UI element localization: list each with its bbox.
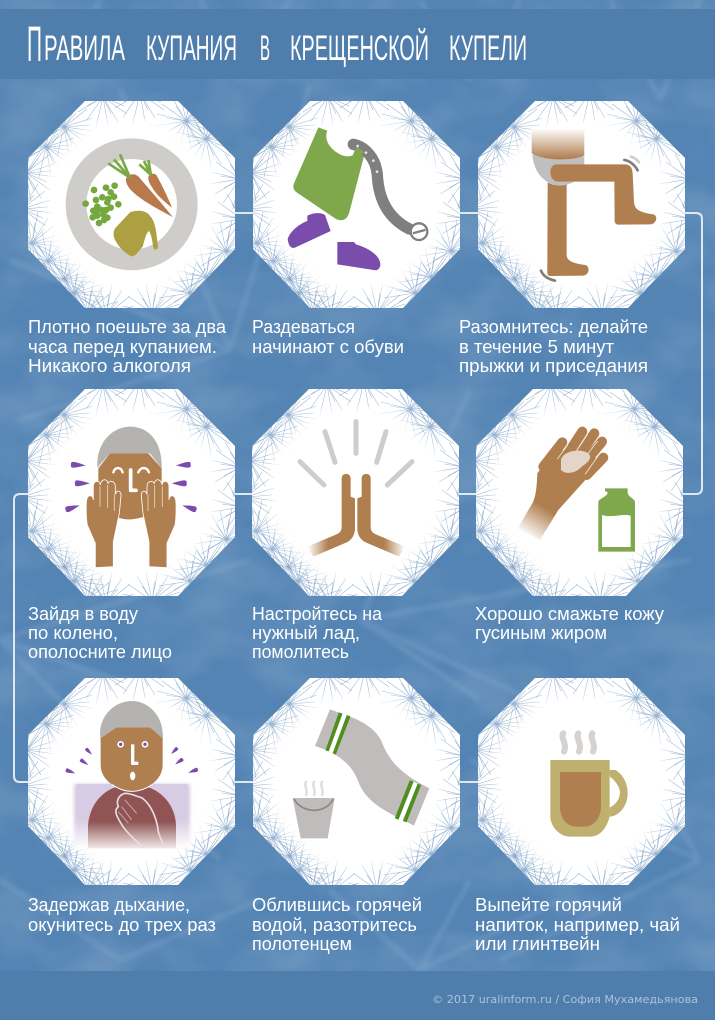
panel: eat before bathing	[0, 62, 272, 376]
caption: Облившись горячей	[252, 895, 422, 915]
icon: clothes	[288, 127, 427, 270]
caption	[475, 895, 680, 954]
caption: Зайдя в воду	[28, 604, 138, 624]
caption: в течение 5 минут	[459, 337, 614, 357]
panel: douse and towel	[216, 639, 497, 954]
title: КУПАНИЯ	[146, 29, 237, 68]
icon: mug	[550, 733, 628, 837]
header band	[0, 9, 715, 79]
caption: Никакого алкоголя	[28, 356, 191, 376]
caption: полотенцем	[252, 934, 352, 954]
panel: rinse face	[0, 350, 272, 662]
caption: Раздеваться	[252, 317, 355, 337]
panel: hot drink	[441, 639, 715, 954]
icon: plate with food	[76, 149, 187, 260]
caption	[475, 604, 664, 643]
title: КУПЕЛИ	[449, 29, 527, 68]
caption: прыжки и приседания	[459, 356, 648, 376]
caption: или глинтвейн	[475, 934, 600, 954]
title: РАВИЛА	[44, 29, 125, 68]
caption	[252, 895, 422, 954]
caption	[459, 317, 648, 376]
icon: legs	[532, 128, 656, 281]
caption	[252, 604, 383, 662]
copyright: © 2017 uralinform.ru / София Мухамедьянова	[432, 993, 698, 1006]
caption: Настройтесь на	[252, 604, 383, 624]
title: В	[260, 29, 270, 68]
caption	[28, 604, 172, 662]
caption: часа перед купанием.	[28, 337, 217, 357]
caption: напиток, например, чай	[475, 915, 680, 935]
caption	[252, 317, 404, 357]
title: КРЕЩЕНСКОЙ	[290, 28, 429, 68]
panel: undress starting with shoes	[216, 62, 497, 357]
title: П	[27, 16, 42, 72]
caption	[28, 317, 227, 376]
caption: Выпейте горячий	[475, 895, 622, 915]
caption: водой, разотритесь	[252, 915, 417, 935]
panel: goose fat	[439, 350, 715, 643]
caption: помолитесь	[252, 642, 349, 662]
caption: ополосните лицо	[28, 642, 172, 662]
panel: warm up	[441, 62, 715, 376]
caption: Плотно поешьте за два	[28, 317, 227, 337]
caption: Разомнитесь: делайте	[459, 317, 648, 337]
panel: dip three times	[0, 639, 272, 935]
caption: гусиным жиром	[475, 623, 607, 643]
caption: начинают с обуви	[252, 337, 404, 357]
icon: towel and bucket	[293, 709, 429, 838]
icon: person holding breath	[65, 701, 199, 848]
icon: hand and jar	[518, 432, 635, 552]
caption	[28, 895, 216, 935]
icon: praying hands	[300, 422, 412, 557]
caption: Хорошо смажьте кожу	[475, 604, 664, 624]
caption: окунитесь до трех раз	[28, 915, 216, 935]
caption: нужный лад,	[252, 623, 360, 643]
panel: pray	[215, 350, 496, 662]
connector lines between panels	[14, 213, 702, 782]
caption: по колено,	[28, 623, 118, 643]
footer band	[0, 971, 715, 1020]
title	[27, 16, 527, 72]
caption: Задержав дыхание,	[28, 895, 190, 915]
icon: washing face	[65, 427, 197, 568]
